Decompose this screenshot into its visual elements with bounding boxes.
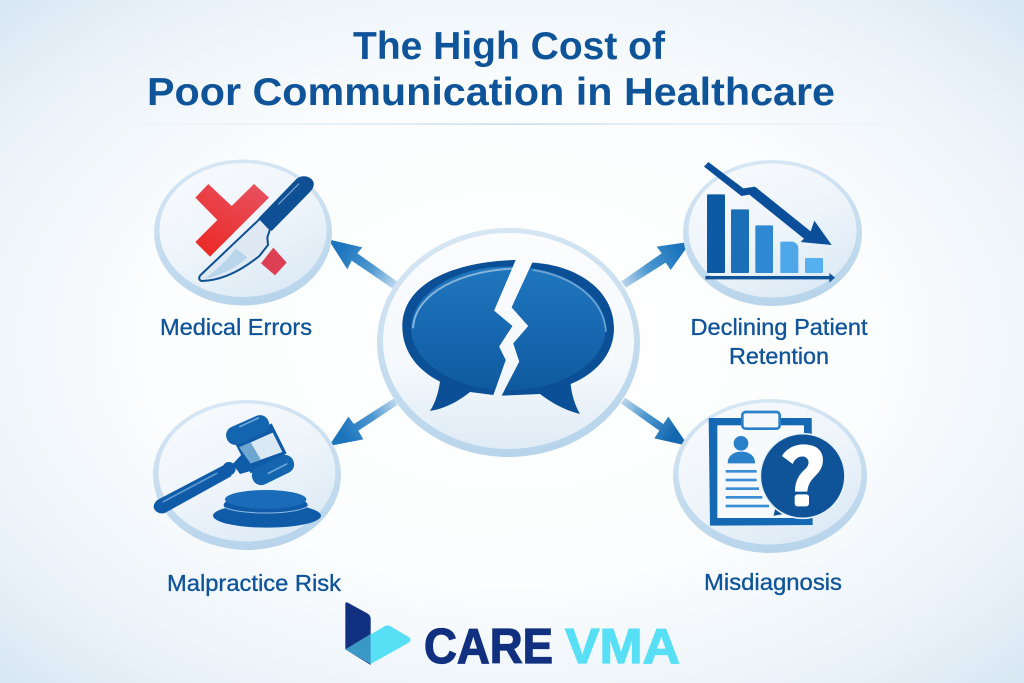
label: malpractice risk: Malpractice Risk — [167, 570, 341, 596]
panel: central broken speech bubble — [377, 228, 640, 457]
label: medical errors: Medical Errors — [160, 314, 312, 340]
icon: red cross and scalpel — [195, 176, 314, 281]
icon: broken speech bubble — [402, 260, 614, 414]
icon: gavel — [154, 412, 321, 528]
label: declining patient retention — [690, 314, 868, 369]
icon: declining bar chart — [704, 162, 835, 283]
title — [147, 25, 835, 114]
panel: misdiagnosis — [673, 399, 867, 553]
arrow: to patient retention — [621, 242, 691, 288]
arrow: to medical errors — [328, 239, 397, 288]
label: declining patient retention: Retention — [729, 343, 829, 369]
panel: medical errors — [154, 160, 332, 306]
icon: clipboard with question mark — [709, 412, 845, 526]
title: The High Cost of — [353, 25, 666, 68]
logo: Care VMA: VMA — [565, 620, 680, 674]
arrows from the central bubble — [328, 239, 691, 446]
wordmark: CARE — [424, 620, 553, 674]
label: declining patient retention: Declining Patient — [690, 314, 868, 340]
arrow: to misdiagnosis — [621, 398, 688, 446]
title: Poor Communication in Healthcare — [147, 71, 835, 114]
icon: logo mark — [345, 602, 410, 665]
arrow: to malpractice risk — [329, 398, 397, 446]
logo: Care VMA — [345, 602, 680, 674]
label: misdiagnosis: Misdiagnosis — [704, 569, 842, 595]
panel: declining patient retention — [683, 160, 862, 306]
panel: malpractice risk — [153, 400, 341, 550]
